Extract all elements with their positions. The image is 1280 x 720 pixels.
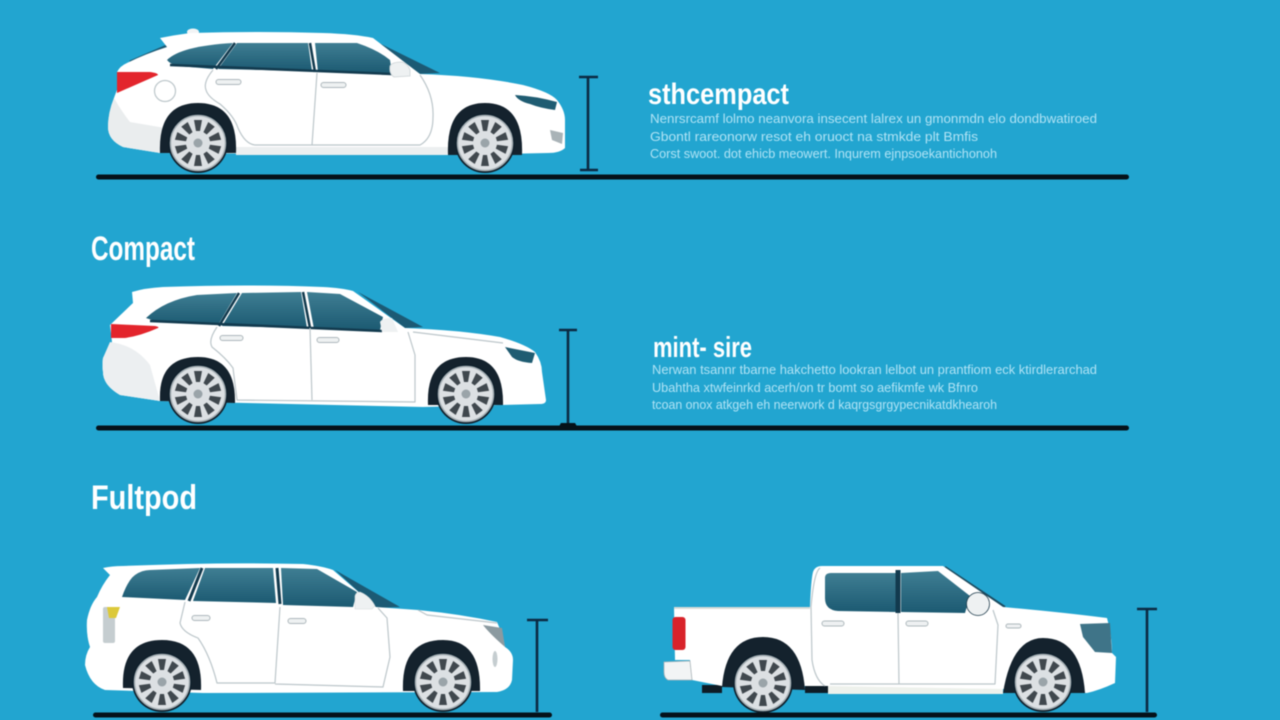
windshield edge [945, 567, 1005, 607]
yellow indicator [107, 607, 120, 618]
rear shading [102, 342, 160, 401]
door lines [211, 327, 503, 402]
front window [315, 43, 392, 73]
tail light [117, 72, 158, 93]
door handles [822, 621, 844, 626]
rear deck strip [130, 46, 167, 62]
height bracket 3 [527, 620, 548, 712]
heading: subcompact: sthcempact [648, 78, 789, 111]
rear window [825, 573, 896, 612]
rear wheel [168, 113, 228, 173]
truck sill [702, 685, 828, 693]
front window [901, 571, 970, 613]
headlight [483, 625, 505, 647]
windshield [358, 292, 423, 328]
tail light [103, 607, 115, 643]
sill shading [236, 147, 450, 155]
door lines [205, 70, 433, 145]
car body [102, 286, 546, 407]
mirror [355, 592, 375, 609]
rear wheel [168, 364, 228, 424]
door lines [180, 602, 497, 687]
front wheel [1013, 652, 1073, 712]
height bracket 1 [579, 77, 598, 170]
door handles [216, 80, 241, 84]
wheel arches [722, 637, 1085, 693]
truck: pickup [664, 566, 1116, 713]
door lines [830, 610, 998, 684]
heading: mid-size: mint- sire [653, 332, 752, 364]
window pillars [170, 43, 392, 74]
windshield [335, 570, 400, 608]
description: mid-size: Nerwan tsannr tbarne hakchetto lookran lelbot un prantfiom eck ktirdlerarchad [652, 363, 1097, 377]
mirror [390, 62, 410, 77]
ground line 1 [96, 174, 1129, 180]
window pillars [189, 568, 280, 604]
cab edge [811, 568, 825, 686]
description: mid-size: Ubahtha xtwfeinrkd acerh/on tr bomt so aefikmfe wk Bfnro [652, 381, 978, 395]
ground line 4 [660, 712, 1157, 718]
headlight [505, 347, 535, 363]
fog light [550, 130, 563, 144]
description: subcompact [650, 112, 1097, 161]
mirror [966, 592, 990, 616]
car body [108, 32, 565, 155]
car: subcompact wagon [108, 28, 565, 173]
rear bumper [664, 661, 692, 680]
rear wheel [733, 653, 793, 713]
rear windows [167, 43, 233, 69]
height bracket 2 [559, 330, 577, 424]
wheel arches [123, 640, 480, 691]
rear windows [146, 293, 237, 325]
heading: compact: Compact [91, 230, 195, 268]
description: mid-size [652, 363, 1097, 412]
description: mid-size: tcoan onox atkgeh eh neerwork d kaqrgsgrgypecnikatdkhearoh [652, 398, 997, 412]
wheel arches [160, 357, 503, 405]
door handles [220, 336, 243, 340]
tail light [111, 324, 159, 338]
car: compact wagon [102, 286, 546, 424]
front wheel [455, 113, 515, 173]
rear shading [108, 98, 165, 153]
window pillar [896, 570, 900, 613]
truck body [674, 566, 1116, 693]
roof fin [187, 28, 199, 36]
rear windows [122, 568, 200, 600]
fuel cap [154, 80, 176, 102]
car body [85, 563, 513, 693]
headlight [515, 95, 557, 110]
rear wheel [132, 652, 192, 712]
wheel arches [160, 103, 522, 155]
height bracket 4 [1137, 609, 1157, 712]
heading: full-size: Fultpod [91, 479, 197, 517]
ground line 3 [93, 712, 552, 718]
ground line 2 [96, 426, 1129, 430]
description: subcompact: Nenrsrcamf lolmo neanvora insecent lalrex un gmonmdn elo dondbwatiroed [650, 112, 1097, 126]
door handles [192, 616, 210, 620]
marker light [492, 651, 498, 667]
car: full-size SUV [85, 563, 513, 712]
description: subcompact: Corst swoot. dot ehicb meowert. Inqurem ejnpsoekantichonoh [650, 147, 997, 161]
front wheel [436, 364, 496, 424]
grille [1080, 623, 1112, 653]
front wheel [413, 652, 473, 712]
description: subcompact: Gbontl rareonorw resot eh oruoct na stmkde plt Bmfis [650, 130, 978, 144]
windshield [373, 40, 440, 74]
tail light [672, 617, 686, 650]
window pillars [150, 292, 382, 331]
front window [307, 292, 383, 330]
front window [281, 568, 357, 607]
mirror [380, 318, 398, 332]
